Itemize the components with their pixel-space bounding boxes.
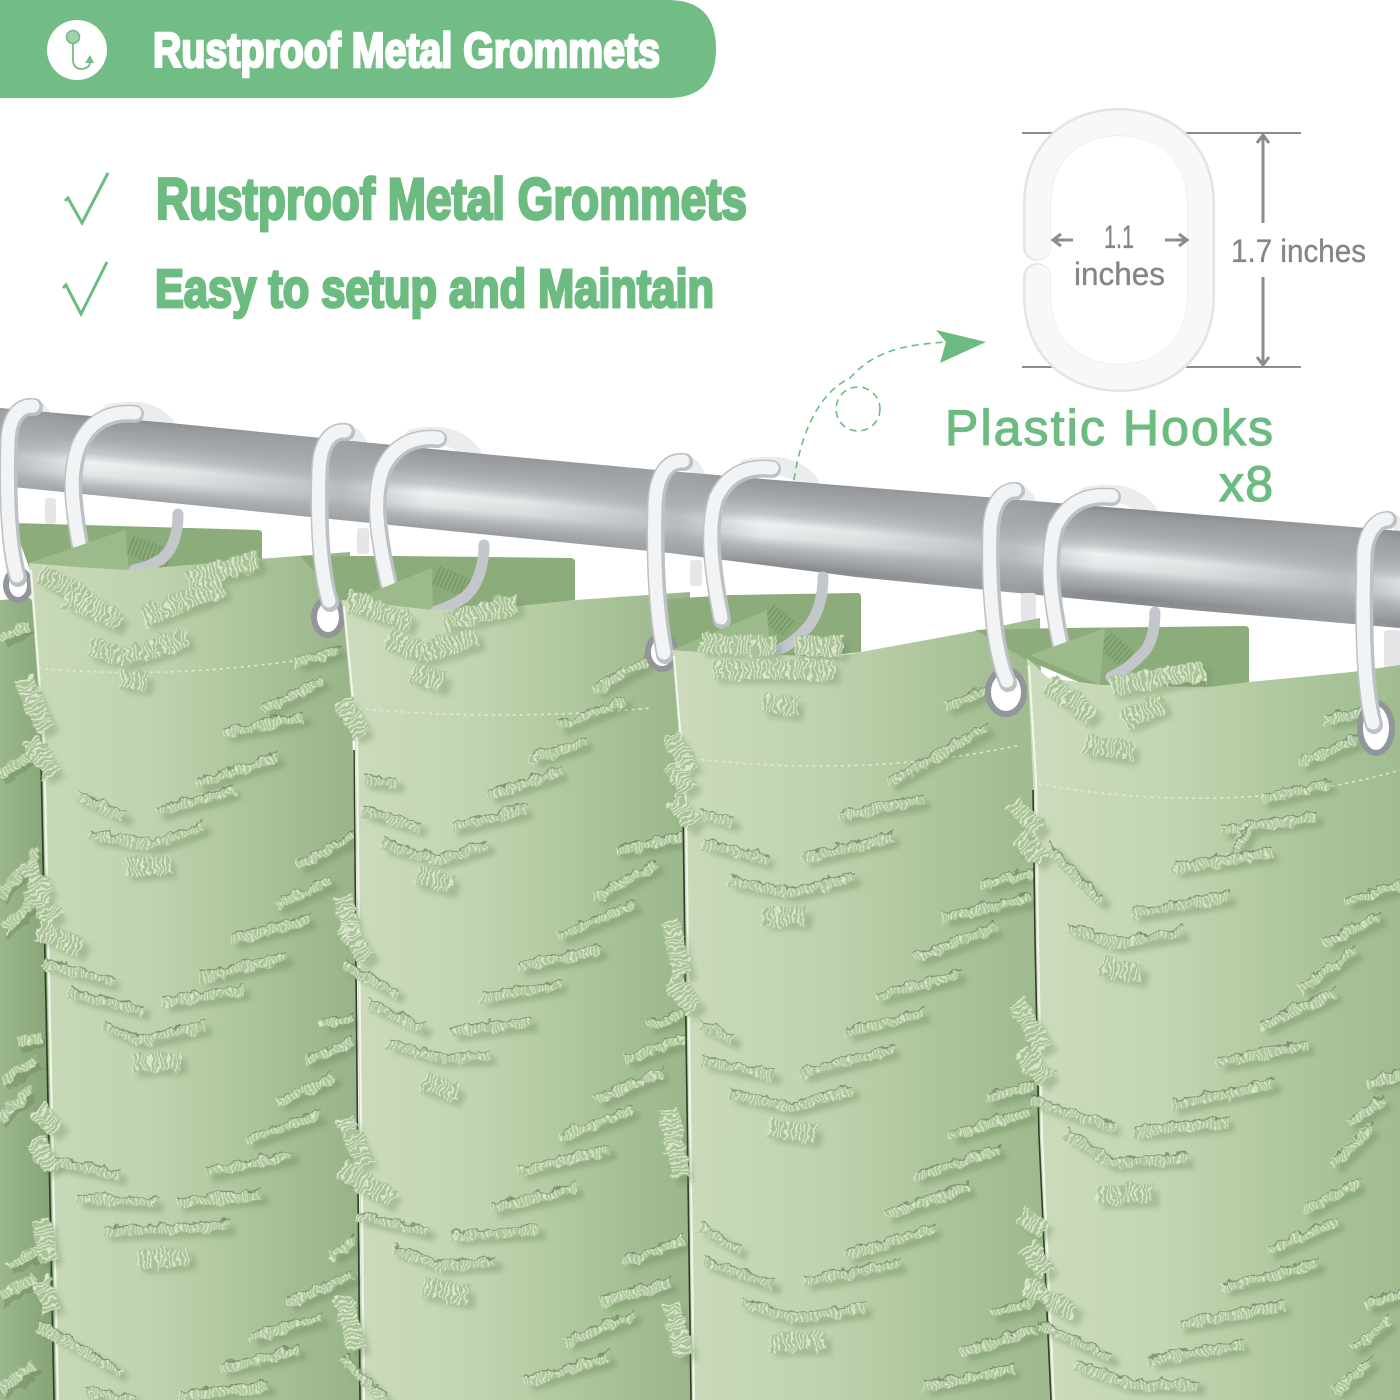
plastic hooks label: Plastic Hooks xyxy=(945,400,1273,456)
curtain panel 3 with grommet and hook xyxy=(648,461,1052,1400)
hook size diagram: 1.7 inches xyxy=(1231,233,1366,269)
icon: check mark 1 xyxy=(65,173,108,223)
icon: hook badge xyxy=(47,20,107,80)
plastic hooks label: x8 xyxy=(1219,456,1273,512)
curtain rod with plastic hooks xyxy=(0,405,1400,668)
hook size diagram xyxy=(1022,122,1366,378)
arrow: dashed curve from rod to hook xyxy=(794,330,986,480)
curtain panel 2 with grommet and hook xyxy=(300,431,702,1400)
curtain panel 4 with grommet and hook xyxy=(975,490,1400,1400)
feature line 2: Easy to setup and Maintain xyxy=(155,259,714,319)
feature line 1: Rustproof Metal Grommets xyxy=(156,167,747,232)
hook size diagram: 1.1 xyxy=(1104,219,1134,255)
hook size diagram: inches xyxy=(1074,256,1165,292)
curtain panel 0 at left edge xyxy=(0,598,62,1400)
banner heading: Rustproof Metal Grommets xyxy=(153,24,660,78)
curtain panel 1 with grommet and hook xyxy=(6,406,362,1400)
icon: check mark 2 xyxy=(63,262,107,314)
plastic hooks label xyxy=(945,400,1273,512)
header banner xyxy=(0,0,716,98)
